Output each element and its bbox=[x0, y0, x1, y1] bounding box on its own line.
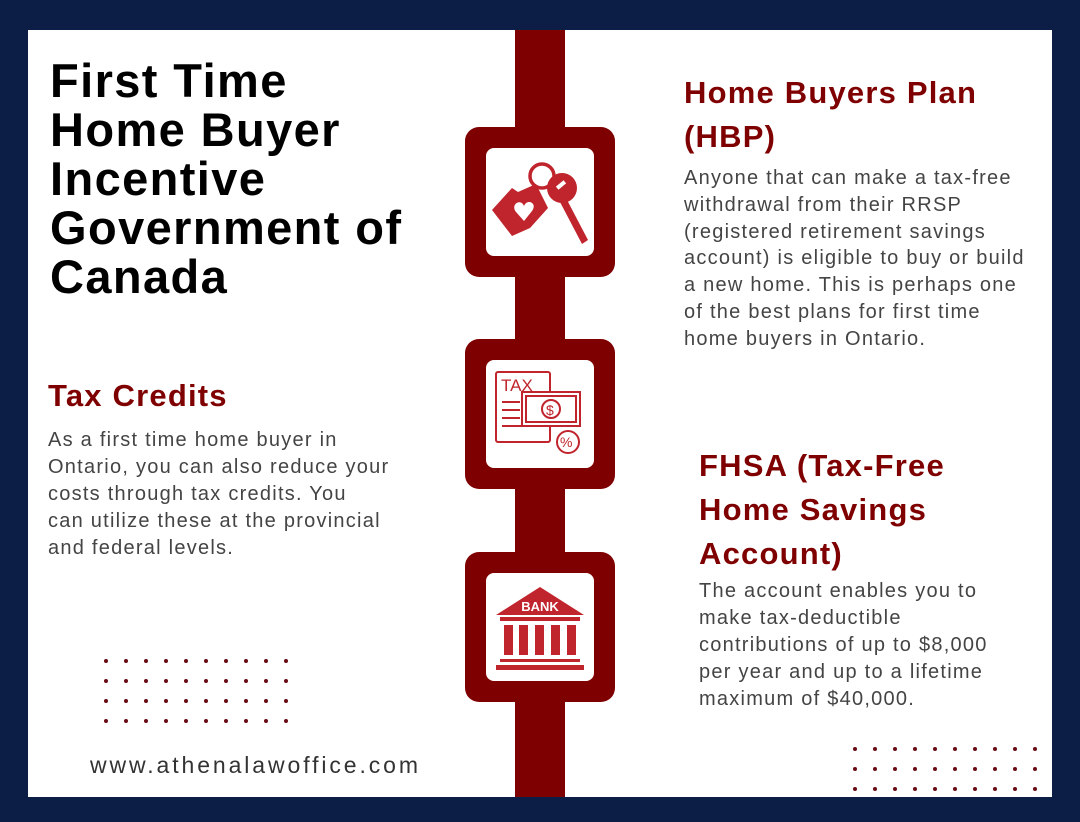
text: HBP: Anyone that can make a tax-free bbox=[684, 167, 1012, 189]
text: FHSA: maximum of $40,000. bbox=[699, 688, 915, 710]
heading: FHSA bbox=[699, 448, 945, 571]
heading: FHSA: FHSA (Tax-Free bbox=[699, 448, 945, 483]
text: FHSA: The account enables you to bbox=[699, 580, 977, 602]
text: FHSA: make tax-deductible bbox=[699, 607, 902, 629]
text: HBP: a new home. This is perhaps one bbox=[684, 274, 1017, 296]
text: HBP: (registered retirement savings bbox=[684, 221, 986, 243]
icon box: tax: % bbox=[560, 434, 572, 450]
text: HBP: withdrawal from their RRSP bbox=[684, 194, 962, 216]
website: www.athenalawoffice.com bbox=[90, 752, 421, 778]
heading: HBP: (HBP) bbox=[684, 119, 776, 154]
text: tax credits: and federal levels. bbox=[48, 537, 234, 559]
text: HBP: home buyers in Ontario. bbox=[684, 328, 926, 350]
text: HBP: account) is eligible to buy or build bbox=[684, 247, 1025, 269]
spine bbox=[515, 30, 565, 797]
icon box: keys bbox=[465, 127, 615, 277]
heading: tax credits: Tax Credits bbox=[48, 378, 228, 413]
text: tax credits: costs through tax credits. You bbox=[48, 483, 347, 505]
heading: FHSA: Home Savings bbox=[699, 492, 927, 527]
dot grid: left bbox=[104, 659, 288, 723]
icon box: tax: $ bbox=[546, 402, 554, 418]
icon box: bank bbox=[465, 552, 615, 702]
title: Home Buyer bbox=[50, 103, 341, 156]
text: FHSA bbox=[699, 580, 988, 710]
title bbox=[50, 54, 402, 303]
title: Incentive bbox=[50, 152, 266, 205]
heading: HBP: Home Buyers Plan bbox=[684, 75, 977, 110]
text: tax credits: can utilize these at the provincial bbox=[48, 510, 381, 532]
dot grid: right bbox=[853, 747, 1037, 791]
heading: HBP bbox=[684, 75, 977, 154]
icon box: tax bbox=[465, 339, 615, 489]
text: HBP: of the best plans for first time bbox=[684, 301, 981, 323]
text: FHSA: contributions of up to $8,000 bbox=[699, 634, 988, 656]
text: tax credits bbox=[48, 429, 389, 559]
title: Government of bbox=[50, 201, 402, 254]
heading: FHSA: Account) bbox=[699, 536, 843, 571]
text: tax credits: Ontario, you can also reduce your bbox=[48, 456, 389, 478]
text: FHSA: per year and up to a lifetime bbox=[699, 661, 983, 683]
icon box: tax: TAX bbox=[501, 376, 533, 395]
icon box: bank: BANK bbox=[521, 599, 559, 614]
text: HBP bbox=[684, 167, 1025, 350]
title: First Time bbox=[50, 54, 288, 107]
text: tax credits: As a first time home buyer in bbox=[48, 429, 338, 451]
title: Canada bbox=[50, 250, 228, 303]
